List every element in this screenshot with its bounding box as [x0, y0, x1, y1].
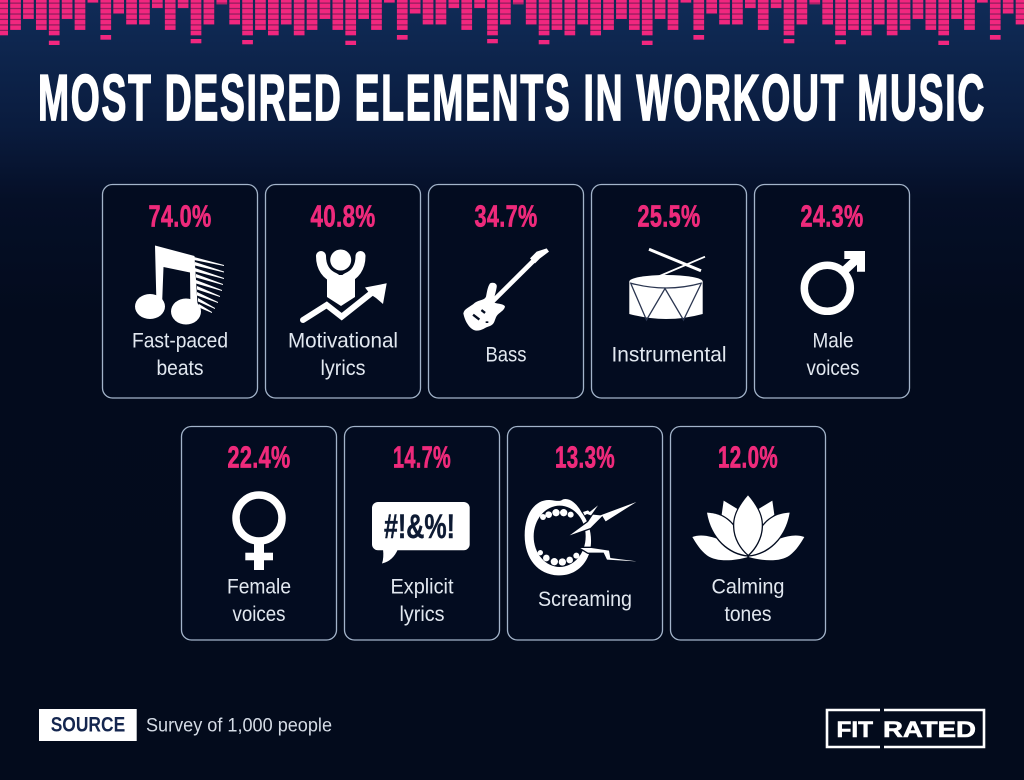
label line 2: tones — [724, 603, 772, 626]
panel: explicit lyrics — [344, 426, 500, 640]
panel: screaming — [508, 426, 662, 640]
percentage: 12.0%: 12.0% — [718, 441, 778, 475]
icon: person cheering with rising arrow — [303, 250, 387, 320]
icon: drum and sticks — [629, 249, 705, 320]
logo: FitRated: RATED — [883, 717, 976, 742]
label line 2: voices — [806, 357, 860, 380]
icon: bass guitar — [463, 248, 549, 331]
percentage: 40.8%: 40.8% — [310, 200, 376, 234]
percentage: 24.3%: 24.3% — [800, 200, 864, 234]
logo: FitRated — [827, 710, 984, 747]
logo: FitRated: FIT — [836, 717, 874, 742]
panel: bass — [428, 184, 584, 398]
percentage: 13.3%: 13.3% — [555, 441, 615, 475]
label: Explicit — [390, 576, 454, 599]
percentage: 34.7%: 34.7% — [474, 200, 538, 234]
percentage: 25.5%: 25.5% — [638, 200, 700, 234]
panel: female voices — [182, 426, 336, 640]
icon: screaming mouth with lightning — [525, 499, 636, 575]
panel: instrumental — [592, 184, 746, 398]
label: Instrumental — [612, 344, 726, 367]
percentage: 74.0%: 74.0% — [148, 200, 212, 234]
label line 2: voices — [232, 603, 286, 626]
label: Male — [812, 330, 854, 352]
percentage: 14.7%: 14.7% — [393, 441, 451, 475]
panel: male voices — [754, 184, 910, 398]
equalizer bars banner — [0, 0, 1024, 45]
label line 2: beats — [156, 357, 204, 380]
source badge: SOURCE — [51, 714, 125, 736]
label: Calming — [712, 576, 784, 599]
source badge — [39, 709, 137, 741]
percentage: 22.4%: 22.4% — [228, 441, 290, 475]
label: Bass — [486, 344, 526, 367]
label: Fast-paced — [132, 330, 228, 352]
icon: speech bubble with censored symbols: #!&%! — [384, 508, 455, 546]
icon: speech bubble with censored symbols — [372, 502, 470, 564]
icon: male symbol — [804, 251, 865, 311]
icon: lotus flower — [692, 495, 804, 560]
icon: female symbol — [236, 495, 282, 570]
label: Female — [227, 576, 291, 599]
panel: fast-paced beats — [102, 184, 258, 398]
label line 2: lyrics — [400, 603, 444, 626]
source text: Survey of 1,000 people — [146, 716, 332, 737]
panel: calming tones — [670, 426, 826, 640]
icon: music notes with speed lines — [135, 246, 224, 324]
label line 2: lyrics — [320, 357, 366, 380]
label: Motivational — [288, 330, 398, 352]
label: Screaming — [538, 588, 632, 611]
panel: motivational lyrics — [266, 184, 420, 398]
